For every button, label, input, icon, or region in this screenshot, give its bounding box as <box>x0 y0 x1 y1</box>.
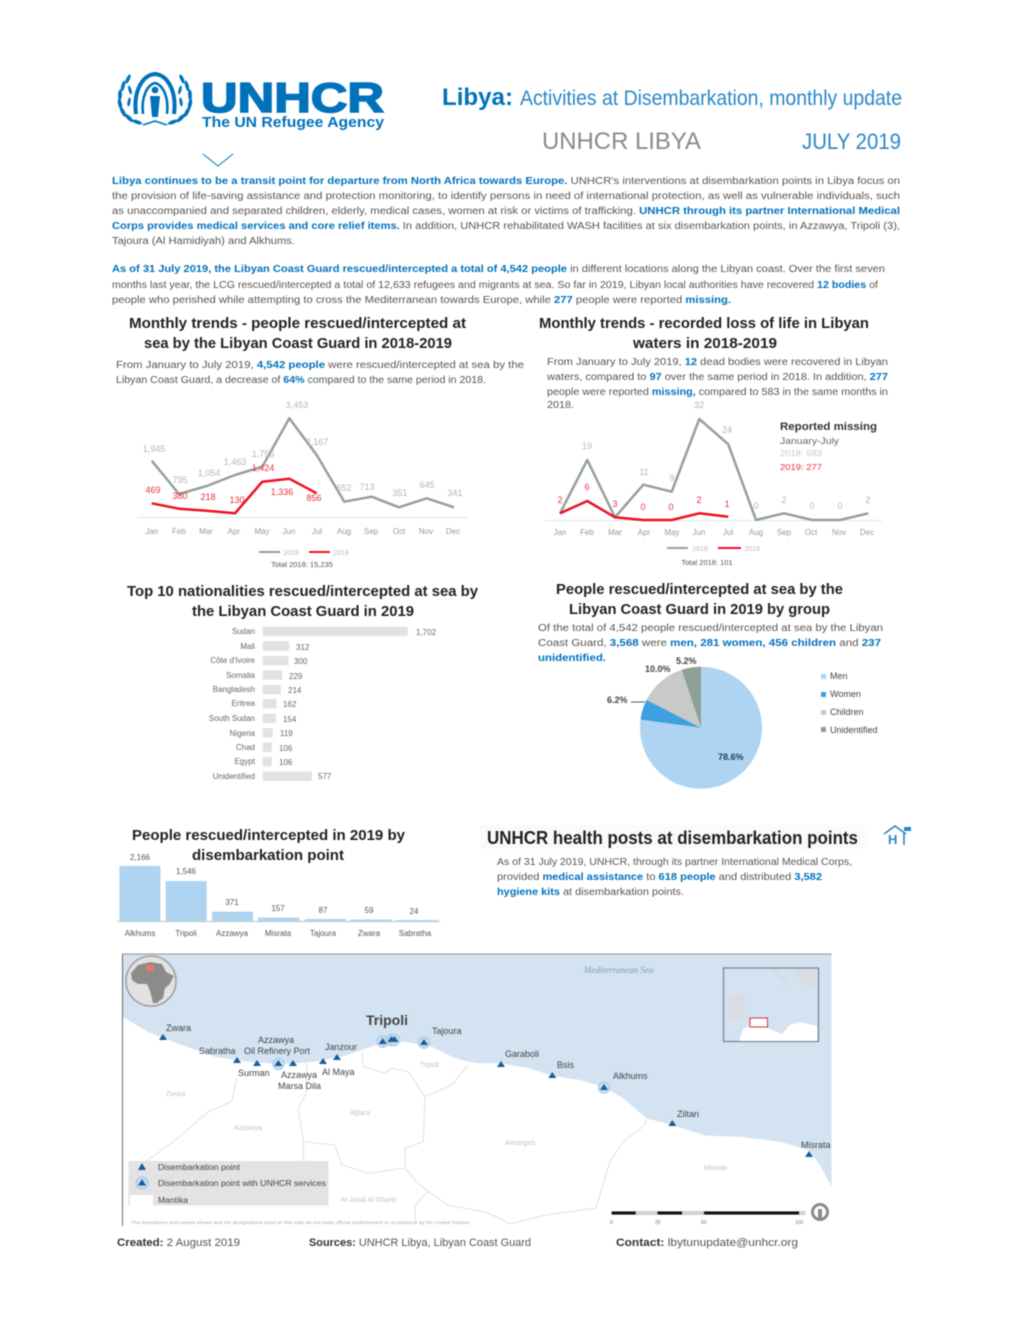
subtitle: date: JULY 2019 <box>802 129 901 154</box>
line chart: 0 <box>668 502 674 512</box>
map legend: Mantika <box>158 1196 189 1205</box>
panel: monthly trends loss of life <box>539 316 888 567</box>
line chart: 1,945 <box>143 444 165 454</box>
inset map <box>724 968 818 1042</box>
heading: waters in 2018-2019 <box>632 336 777 352</box>
place labels: Janzour <box>325 1042 357 1052</box>
footer: contact: Contact: lbytunupdate@unhcr.org <box>616 1237 798 1249</box>
text block: coast guard summary: months last year, the LCG rescued/intercepted a total of 12,633 refugees and migrants at sea. So far in 2019, Libyan local authorities have recovered 12 bodies of <box>112 280 878 291</box>
line chart: 1,756 <box>252 449 274 459</box>
bar chart: Tajoura <box>310 929 337 938</box>
text block: hygiene kits at disembarkation points. <box>497 887 684 898</box>
line chart: Feb <box>172 527 186 536</box>
text block: As of 31 July 2019, UNHCR, through its partner International Medical Corps, <box>497 857 852 868</box>
heading: Libyan Coast Guard in 2019 by group <box>569 602 830 618</box>
place labels: Tripoli <box>420 1062 439 1069</box>
bar chart: 162 <box>283 700 297 709</box>
text block: Coast Guard, 3,568 were men, 281 women, 456 children and 237 <box>538 638 882 649</box>
footer: created: Created: 2 August 2019 <box>117 1237 240 1249</box>
text block: From January to July 2019, 12 dead bodies were recovered in Libyan <box>547 357 888 368</box>
line chart: Jun <box>693 528 705 537</box>
place labels: Azzawya <box>281 1070 317 1080</box>
heading <box>539 316 869 352</box>
line chart: 0 <box>753 501 759 511</box>
line chart: Jan <box>146 527 158 536</box>
line chart: Jan <box>554 528 566 537</box>
bar chart: Zwara <box>358 929 381 938</box>
text block: provided medical assistance to 618 people and distributed 3,582 <box>497 872 822 883</box>
line chart: 341 <box>447 488 463 498</box>
callout: reported missing <box>780 421 877 472</box>
line chart: 2 <box>865 495 871 505</box>
text block: unidentified. <box>538 653 606 664</box>
map legend: Disembarkation point with UNHCR services <box>158 1179 326 1188</box>
bar chart: 312 <box>296 643 310 652</box>
line chart <box>545 400 882 567</box>
bar chart: Nigeria <box>230 729 256 738</box>
line chart: Oct <box>393 527 406 536</box>
icon: north arrow <box>812 1204 828 1221</box>
text block <box>538 623 883 664</box>
text block: introduction: as unaccompanied and separated children, elderly, medical cases, women at risk or victims of trafficking. UNHCR through its partner International Medical <box>112 206 900 217</box>
line chart: 645 <box>419 480 435 490</box>
panel: health posts <box>480 825 911 898</box>
text block: introduction: Tajoura (Al Hamidiyah) and Alkhums. <box>112 236 295 247</box>
place labels: Alkhums <box>613 1071 648 1081</box>
legend: Children <box>830 707 864 717</box>
logo wordmark: UNHCR <box>201 74 384 121</box>
bar chart: 119 <box>280 729 293 738</box>
logo tagline: The UN Refugee Agency <box>202 115 384 131</box>
legend: Men <box>830 671 848 681</box>
line chart: 2019 <box>333 550 349 557</box>
bar chart: 157 <box>271 904 285 913</box>
line chart: 2 <box>557 495 563 505</box>
place labels: Azzawya <box>234 1125 262 1132</box>
heading: Monthly trends - people rescued/intercepted at <box>129 316 466 332</box>
line chart: 9 <box>669 473 675 483</box>
bar chart: 1,546 <box>176 867 197 876</box>
legend <box>821 671 878 735</box>
heading: sea by the Libyan Coast Guard in 2018-2019 <box>144 336 452 352</box>
bar chart: Mali <box>240 642 255 651</box>
line chart: Oct <box>805 528 818 537</box>
title: Activities at Disembarkation, monthly update <box>520 87 902 110</box>
line chart: 19 <box>582 441 592 451</box>
line chart: Sep <box>777 528 792 537</box>
panel: people by group <box>538 582 883 789</box>
pie chart: 10.0% <box>645 664 671 674</box>
bar chart: Egypt <box>235 757 256 766</box>
line chart: Apr <box>228 527 241 536</box>
line chart: 11 <box>639 467 649 477</box>
text block: coast guard summary: As of 31 July 2019, the Libyan Coast Guard rescued/intercepted a total of 4,542 people in different locations along the Libyan coast. Over the first seven <box>112 264 885 275</box>
text block <box>546 357 888 411</box>
line chart: 1,463 <box>224 457 246 467</box>
place labels: Sabratha <box>199 1046 236 1056</box>
bar chart: Unidentified <box>213 772 255 781</box>
line chart: Dec <box>446 527 460 536</box>
line chart: 2 <box>696 495 702 505</box>
line chart: 2018 <box>692 546 708 553</box>
line chart: 351 <box>392 488 408 498</box>
line chart: 2019 <box>744 546 760 553</box>
bar chart: Tripoli <box>175 929 197 938</box>
icon: UNHCR emblem <box>117 74 193 126</box>
place labels: Al Maya <box>322 1067 355 1077</box>
heading: Monthly trends - recorded loss of life in Libyan <box>539 316 869 332</box>
icon: health post <box>884 826 911 847</box>
scale bar: 100 <box>795 1220 804 1226</box>
line chart: Aug <box>337 527 351 536</box>
text block: introduction: the provision of life-saving assistance and protection monitoring, to identify persons in need of international protection, as well as vulnerable individuals, such <box>112 191 900 202</box>
heading <box>132 828 405 864</box>
line chart: Jun <box>283 527 295 536</box>
map legend: Disembarkation point <box>158 1163 241 1172</box>
text block <box>116 360 524 386</box>
heading: People rescued/intercepted in 2019 by <box>132 828 405 844</box>
disembarkation markers <box>159 1034 813 1157</box>
bar chart: Bangladesh <box>213 685 255 694</box>
line chart: Jul <box>312 527 322 536</box>
text block: people were reported missing, compared to 583 in the same months in <box>547 387 888 398</box>
globe locator <box>126 956 176 1006</box>
bar chart <box>117 853 440 938</box>
line chart: 1 <box>724 499 730 509</box>
line chart: 469 <box>145 485 161 495</box>
bar chart: Eritrea <box>231 699 256 708</box>
line chart: 1,336 <box>271 487 293 497</box>
place labels: Tripoli <box>366 1012 408 1028</box>
text block: 2018. <box>547 400 574 411</box>
line chart: Jul <box>723 528 733 537</box>
heading: disembarkation point <box>192 848 344 864</box>
map sea and land <box>122 954 832 1226</box>
line chart: 6 <box>584 482 590 492</box>
bar chart: 300 <box>294 657 308 666</box>
panel: monthly trends rescued <box>116 316 524 569</box>
text block: coast guard summary <box>112 264 885 306</box>
line chart: 652 <box>336 483 352 493</box>
line chart: 1,054 <box>198 468 220 478</box>
place labels: Misrata <box>704 1165 727 1172</box>
text block: From January to July 2019, 4,542 people were rescued/intercepted at sea by the <box>116 360 524 371</box>
label: sea: Mediterranean Sea <box>583 965 654 975</box>
legend: Women <box>830 689 861 699</box>
bar chart: 229 <box>289 672 303 681</box>
place labels: Aljfara <box>350 1110 370 1117</box>
line chart: 380 <box>172 491 188 501</box>
bar chart: Chad <box>236 743 255 752</box>
line chart: Nov <box>832 528 846 537</box>
bar chart: 106 <box>279 744 293 753</box>
icon: health post: H <box>888 832 897 847</box>
line chart: 2,167 <box>306 437 328 447</box>
place labels: Al Jabal Al Gharbi <box>341 1197 397 1204</box>
callout: reported missing: 2019: 277 <box>780 462 822 472</box>
bar chart: 59 <box>365 906 374 915</box>
scale bar: 25 <box>655 1220 661 1226</box>
map legend <box>128 1161 328 1206</box>
line chart: Total 2018: 15,235 <box>271 560 333 569</box>
line chart: 713 <box>359 482 375 492</box>
map: disembarkation points <box>122 954 832 1226</box>
line chart: 856 <box>306 493 322 503</box>
line chart: 24 <box>722 425 732 435</box>
bar chart: Azzawya <box>216 929 249 938</box>
line chart: May <box>254 527 270 536</box>
heading: the Libyan Coast Guard in 2019 <box>192 604 414 620</box>
line chart: 1,424 <box>252 463 274 473</box>
bar chart: 87 <box>319 906 328 915</box>
line chart: May <box>664 528 680 537</box>
bar chart: 371 <box>225 898 239 907</box>
line chart: 795 <box>172 475 188 485</box>
title: Libya: <box>442 84 513 111</box>
scale bar <box>610 1212 805 1226</box>
subtitle: office: UNHCR LIBYA <box>542 128 701 155</box>
line chart: 0 <box>837 501 843 511</box>
bar chart: 577 <box>318 772 332 781</box>
pie chart: 5.2% <box>676 656 697 666</box>
line chart: Apr <box>638 528 651 537</box>
line chart: 0 <box>809 501 815 511</box>
bar chart: Alkhums <box>125 929 155 938</box>
bar chart: Côte d'Ivoire <box>210 656 256 665</box>
pie chart: 6.2% <box>607 695 628 705</box>
place labels <box>166 1012 831 1204</box>
line chart <box>138 400 467 569</box>
bar chart: 106 <box>279 758 293 767</box>
heading <box>129 316 466 352</box>
text block: Libyan Coast Guard, a decrease of 64% compared to the same period in 2018. <box>116 375 486 386</box>
text block: coast guard summary: people who perished while attempting to cross the Mediterranean towards Europe, while 277 people were reported missing. <box>112 295 731 306</box>
heading: Top 10 nationalities rescued/intercepted at sea by <box>127 584 478 600</box>
heading <box>556 582 843 618</box>
bar chart: South Sudan <box>209 714 255 723</box>
line chart: Total 2018: 101 <box>681 558 733 567</box>
legend: Unidentified <box>830 725 878 735</box>
text block: waters, compared to 97 over the same period in 2018. In addition, 277 <box>546 372 888 383</box>
heading: UNHCR health posts at disembarkation points <box>487 828 858 848</box>
line chart: 218 <box>200 492 216 502</box>
line chart: Nov <box>419 527 433 536</box>
text block: Of the total of 4,542 people rescued/intercepted at sea by the Libyan <box>538 623 883 634</box>
place labels: Garaboli <box>505 1049 539 1059</box>
bar chart: Somalia <box>226 671 256 680</box>
callout: reported missing: 2018: 583 <box>780 449 823 458</box>
bar chart: Misrata <box>265 929 292 938</box>
title <box>442 84 902 111</box>
bar chart: Sudan <box>232 627 255 636</box>
bar chart: Sabratha <box>399 929 432 938</box>
line chart: Mar <box>199 527 213 536</box>
place labels: Zwara <box>166 1091 186 1098</box>
line chart: 3 <box>612 499 618 509</box>
map disclaimer: The boundaries and names shown and the designations used on this map do not imply official endorsement or acceptance by the United Nations. <box>131 1220 471 1225</box>
line chart: 2018 <box>283 550 299 557</box>
bar chart <box>209 627 437 781</box>
bar chart: 2,166 <box>130 853 151 862</box>
footer: sources: Sources: UNHCR Libya, Libyan Coast Guard <box>309 1237 531 1249</box>
line chart: 32 <box>694 400 704 410</box>
place labels: Zwara <box>166 1023 191 1033</box>
place labels: Oil Refinery Port <box>244 1046 311 1056</box>
place labels: Tajoura <box>432 1026 462 1036</box>
place labels: Almargeb <box>505 1140 535 1147</box>
text block: introduction <box>112 176 900 247</box>
panel: disembarkation point chart <box>117 828 440 938</box>
place labels: Bsis <box>557 1060 575 1070</box>
place labels: Azzawya <box>258 1035 294 1045</box>
line chart: 3,453 <box>286 400 308 410</box>
line chart: Sep <box>364 527 379 536</box>
panel: top 10 nationalities <box>127 584 478 781</box>
UNHCR logo <box>117 74 384 131</box>
text block: introduction: Corps provides medical services and core relief items. In addition, UNHCR rehabilitated WASH facilities at six disembarkation points, in Azzawya, Tripoli (3), <box>112 221 900 232</box>
line chart: 2 <box>781 495 787 505</box>
line chart: Feb <box>580 528 594 537</box>
pie chart: 78.6% <box>718 752 744 762</box>
scale bar: 50 <box>701 1220 707 1226</box>
heading: People rescued/intercepted at sea by the <box>556 582 843 598</box>
line chart: Aug <box>749 528 763 537</box>
place labels: Misrata <box>801 1140 831 1150</box>
place labels: Marsa Dila <box>278 1081 321 1091</box>
scale bar: 0 <box>610 1220 613 1226</box>
bar chart: 154 <box>283 715 297 724</box>
place labels: Surman <box>238 1068 270 1078</box>
bar chart: 214 <box>288 686 302 695</box>
heading <box>127 584 478 620</box>
callout: reported missing: Reported missing <box>780 421 877 433</box>
place labels: Ziltan <box>677 1109 699 1119</box>
bar chart: 1,702 <box>416 628 437 637</box>
text block: introduction: Libya continues to be a transit point for departure from North Africa towards Europe. UNHCR's interventions at disembarkation points in Libya focus on <box>112 176 900 187</box>
line chart: Mar <box>608 528 622 537</box>
text block <box>497 857 852 898</box>
pie chart <box>607 656 762 789</box>
line chart: 0 <box>640 502 646 512</box>
line chart: Dec <box>860 528 874 537</box>
bar chart: 24 <box>410 907 419 916</box>
line chart: 130 <box>229 495 245 505</box>
callout: reported missing: January-July <box>780 436 839 447</box>
icon: chevron <box>203 154 233 166</box>
